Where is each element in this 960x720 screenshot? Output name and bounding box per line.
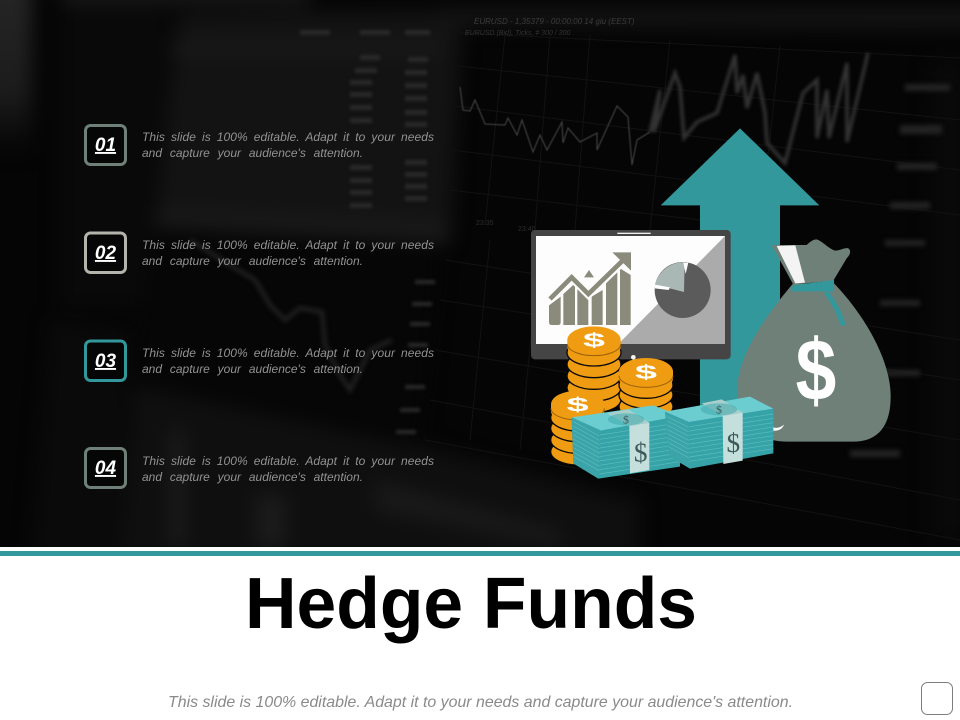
badge 04 — [86, 448, 126, 488]
banknote dollar signs: $ — [634, 437, 648, 467]
price line chart, blurred part — [650, 53, 868, 163]
text 03: This slide is 100% editable. Adapt it to your needs — [142, 346, 434, 360]
badge 03 — [86, 341, 126, 380]
teal divider band — [0, 551, 960, 556]
empty rounded page-number box — [922, 682, 952, 714]
panel: dark trading screen background: 23:40 — [518, 226, 536, 233]
badge 02: 02 — [95, 243, 116, 264]
text 03: and capture your audience's attention. — [142, 362, 363, 376]
bar chart with rising arrow — [549, 252, 631, 325]
icon: banknote stack right: $ — [716, 402, 722, 416]
title: Hedge Funds — [245, 564, 697, 644]
icon: banknote stack right — [665, 397, 773, 469]
text 01 — [142, 130, 434, 160]
icon: money bag — [737, 239, 891, 442]
panel: dark trading screen background: 23:35 — [476, 220, 494, 227]
chart header text: EURUSD - 1,35379 - 00:00:00 14 giu (EEST) — [474, 17, 635, 26]
illustration: finance growth cluster — [531, 128, 891, 479]
table figures — [300, 30, 435, 434]
icon: coin stack left: $ — [567, 395, 589, 416]
badge 01: 01 — [95, 135, 116, 156]
subtitle text: This slide is 100% editable. Adapt it to your needs and capture your audience's attention. — [168, 694, 793, 711]
text 03 — [142, 346, 434, 376]
badge 03: 03 — [95, 351, 116, 372]
list item 04 — [86, 448, 434, 488]
icon: banknote stack left: $ — [623, 412, 629, 426]
icon: presentation monitor — [531, 230, 731, 359]
panel: dark trading screen background: EURUSD (Bid), Ticks, # 300 / 300 — [465, 30, 570, 37]
icon: coin stack right — [619, 358, 673, 420]
badge 02 — [86, 233, 126, 272]
pie chart — [655, 262, 711, 318]
badge 01 — [86, 126, 126, 164]
arrow: teal growth arrow — [661, 128, 819, 407]
text 02: This slide is 100% editable. Adapt it to your needs — [142, 238, 434, 252]
text 02 — [142, 238, 434, 268]
list item 03 — [86, 341, 434, 380]
right axis labels — [850, 84, 950, 457]
text 02: and capture your audience's attention. — [142, 254, 363, 268]
text 04: This slide is 100% editable. Adapt it to your needs — [142, 454, 434, 468]
icon: coin stack back: $ — [583, 331, 606, 352]
text 01: This slide is 100% editable. Adapt it to your needs — [142, 130, 434, 144]
panel: dark trading screen background — [0, 0, 960, 560]
list item 02 — [86, 233, 434, 272]
icon: coin stack left — [551, 391, 605, 465]
dollar sign: $ — [796, 321, 836, 419]
icon: coin stack back — [567, 326, 621, 413]
icon: coin stack right: $ — [635, 362, 658, 383]
small white dot — [631, 355, 636, 360]
left small blurred candlestick chart — [190, 240, 392, 390]
price line chart, sharp part — [460, 87, 650, 165]
badge 04: 04 — [95, 458, 116, 479]
banknote dollar signs: $ — [726, 428, 740, 458]
list item 01 — [86, 126, 434, 164]
text 04: and capture your audience's attention. — [142, 470, 363, 484]
icon: banknote stack left — [572, 405, 680, 479]
text 01: and capture your audience's attention. — [142, 146, 363, 160]
grid lines — [425, 33, 960, 540]
text 04 — [142, 454, 434, 484]
